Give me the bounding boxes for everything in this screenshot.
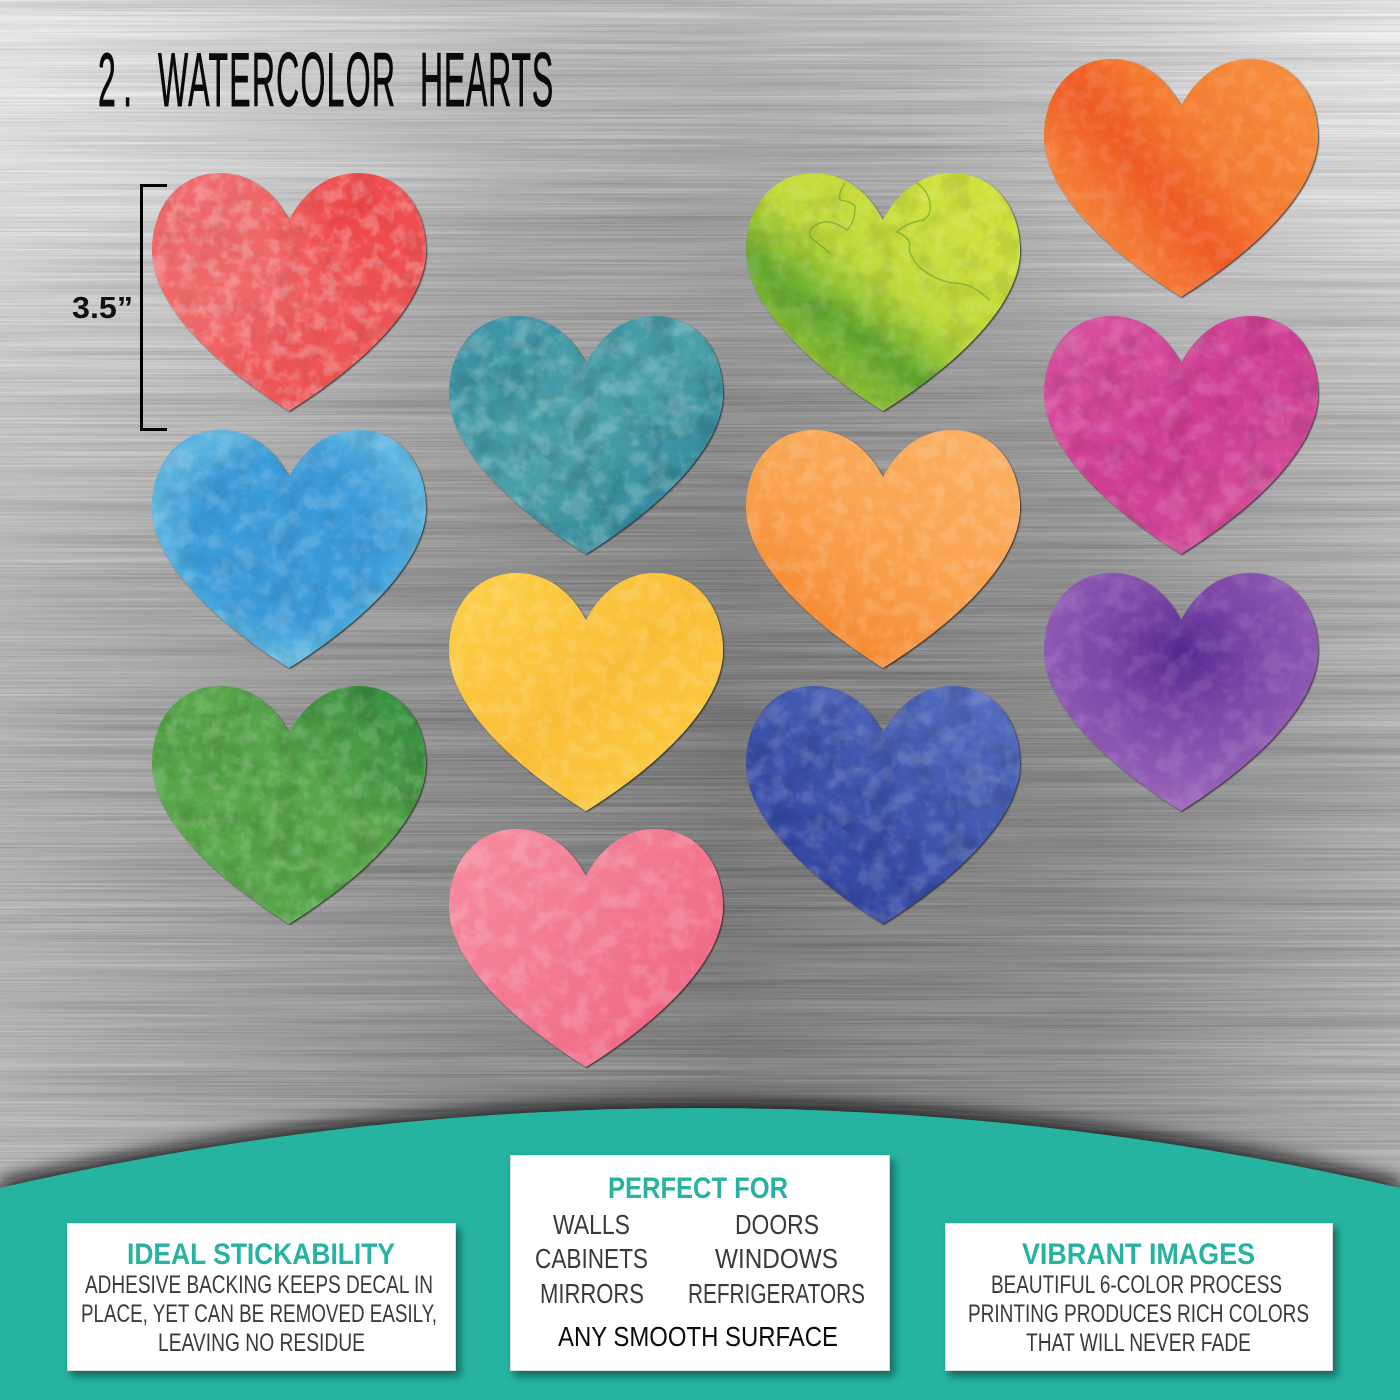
heart: navy [746, 686, 1020, 924]
title [98, 38, 553, 123]
body text: LEAVING NO RESIDUE [158, 1329, 365, 1357]
body text: ADHESIVE BACKING KEEPS DECAL IN [85, 1271, 433, 1299]
surface list: WALLS [553, 1209, 630, 1240]
size dimension: 3.5 inch bracket: 3.5” [72, 290, 133, 325]
title: 2. [98, 38, 132, 123]
size dimension: 3.5 inch bracket [72, 186, 167, 430]
surface list: DOORS [735, 1209, 819, 1240]
panel: perfect for [510, 1156, 890, 1370]
panel: vibrant images [946, 1224, 1332, 1370]
heart: light orange [746, 430, 1020, 668]
body text: THAT WILL NEVER FADE [1026, 1329, 1251, 1357]
heart: teal [449, 316, 723, 554]
title: WATERCOLOR [158, 38, 395, 123]
body text [968, 1271, 1309, 1357]
body text: PLACE, YET CAN BE REMOVED EASILY, [81, 1300, 437, 1328]
heading: IDEAL STICKABILITY [127, 1238, 395, 1271]
surface list: WINDOWS [715, 1243, 838, 1274]
heart: magenta [1044, 316, 1318, 554]
heart: red [152, 173, 426, 411]
heart: yellow [449, 573, 723, 811]
heart: blue [152, 430, 426, 668]
surface list [535, 1209, 865, 1309]
heading: PERFECT FOR [608, 1172, 788, 1205]
surface list: REFRIGERATORS [688, 1278, 865, 1309]
surface list: CABINETS [535, 1243, 648, 1274]
heart: orange [1044, 59, 1318, 297]
heart: pink [449, 829, 723, 1067]
body text [81, 1271, 437, 1357]
title: HEARTS [420, 38, 553, 123]
heart: purple [1044, 573, 1318, 811]
heading: VIBRANT IMAGES [1022, 1238, 1255, 1271]
teal footer band [0, 1108, 1400, 1400]
body text: BEAUTIFUL 6-COLOR PROCESS [991, 1271, 1282, 1299]
surface list: MIRRORS [540, 1278, 644, 1309]
heart: lime [746, 173, 1020, 411]
heart: green [152, 686, 426, 924]
panel: ideal stickability [68, 1224, 456, 1370]
any smooth surface: ANY SMOOTH SURFACE [558, 1321, 838, 1352]
